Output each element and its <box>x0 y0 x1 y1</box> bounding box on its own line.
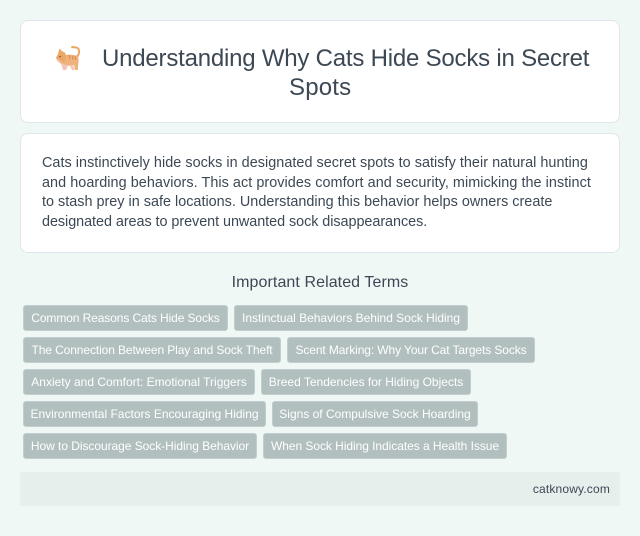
tag: The Connection Between Play and Sock Theft <box>31 343 273 357</box>
heading: related terms: Important Related Terms <box>232 274 408 291</box>
summary text: and hoarding behaviors. This act provides comfort and security, mimicking the instinct <box>42 175 591 191</box>
title: Understanding Why Cats Hide Socks in Secret <box>102 45 589 72</box>
tag: When Sock Hiding Indicates a Health Issue <box>271 439 499 453</box>
tag: Environmental Factors Encouraging Hiding <box>30 407 259 421</box>
summary text: Cats instinctively hide socks in designated secret spots to satisfy their natural hunting <box>42 155 588 171</box>
tag <box>287 337 535 363</box>
tag: Breed Tendencies for Hiding Objects <box>269 375 463 389</box>
tag <box>234 305 468 331</box>
tag <box>23 433 257 459</box>
tag: Instinctual Behaviors Behind Sock Hiding <box>242 311 460 325</box>
tag: Anxiety and Comfort: Emotional Triggers <box>31 375 247 389</box>
tag: Common Reasons Cats Hide Socks <box>31 311 220 325</box>
footer source: catknowy.com <box>533 482 610 496</box>
icon: cat <box>56 46 80 70</box>
tags: related terms <box>23 305 535 459</box>
tag: Scent Marking: Why Your Cat Targets Socks <box>295 343 527 357</box>
tag <box>272 401 478 427</box>
panel: title card <box>20 20 620 123</box>
tag <box>263 433 507 459</box>
tag <box>23 401 266 427</box>
summary text: to stash prey in safe locations. Understanding this behavior helps owners create <box>42 194 552 210</box>
tag <box>23 369 255 395</box>
panel: summary card <box>20 133 620 253</box>
summary text <box>42 155 591 230</box>
tag <box>23 305 228 331</box>
tag: How to Discourage Sock-Hiding Behavior <box>31 439 249 453</box>
panel: title card: Spots <box>289 74 351 101</box>
footer <box>20 472 620 506</box>
summary text: designated areas to prevent unwanted sock disappearances. <box>42 214 427 230</box>
tag <box>261 369 471 395</box>
tag <box>23 337 281 363</box>
tag: Signs of Compulsive Sock Hoarding <box>279 407 471 421</box>
